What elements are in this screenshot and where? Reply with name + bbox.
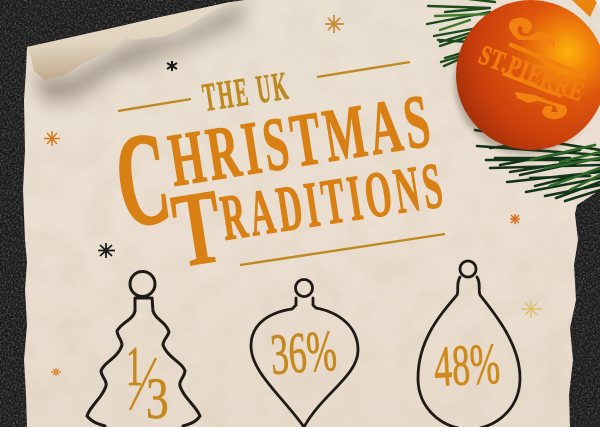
rule right of The UK bbox=[317, 62, 410, 77]
stat: tree bauble one third bbox=[87, 272, 200, 427]
star: dark upper bbox=[167, 61, 177, 71]
star: small orange right bbox=[510, 214, 520, 224]
orange St Pierre bauble bbox=[456, 0, 600, 150]
title bbox=[107, 62, 451, 290]
rule under title bbox=[240, 234, 445, 265]
onion bauble outline bbox=[251, 280, 358, 427]
bauble logo: ST.PIERRE bbox=[475, 39, 589, 108]
pine branch: lower bbox=[475, 130, 600, 201]
title line: The UK: THE UK bbox=[200, 63, 293, 120]
star: orange left bbox=[44, 131, 60, 146]
one third value: 1 bbox=[126, 335, 143, 397]
title line: Traditions: RADITIONS bbox=[216, 150, 451, 255]
bauble logo bbox=[475, 18, 589, 119]
tree outline bbox=[87, 272, 200, 426]
title line: Christmas bbox=[107, 79, 439, 255]
star: small orange lower left bbox=[51, 368, 61, 376]
rule left of The UK bbox=[118, 99, 191, 111]
curled scroll corner bbox=[27, 2, 245, 100]
pine branch: upper bbox=[427, 0, 495, 66]
bauble shadow bbox=[454, 10, 598, 154]
star: gold right bbox=[521, 300, 542, 318]
teardrop bauble outline bbox=[418, 261, 520, 427]
36 percent value: 36% bbox=[268, 319, 339, 387]
48 percent value: 48% bbox=[432, 332, 502, 399]
title line: Christmas: C bbox=[107, 103, 178, 255]
title line: Traditions: T bbox=[165, 168, 230, 290]
stat: teardrop bauble 48% bbox=[418, 261, 520, 427]
title line: Traditions bbox=[165, 150, 451, 290]
star: orange top bbox=[325, 15, 344, 33]
title line: Christmas: HRISTMAS bbox=[164, 79, 439, 203]
one third value bbox=[126, 335, 169, 427]
star: dark lower left bbox=[98, 243, 115, 258]
stat: onion bauble 36% bbox=[251, 280, 358, 427]
